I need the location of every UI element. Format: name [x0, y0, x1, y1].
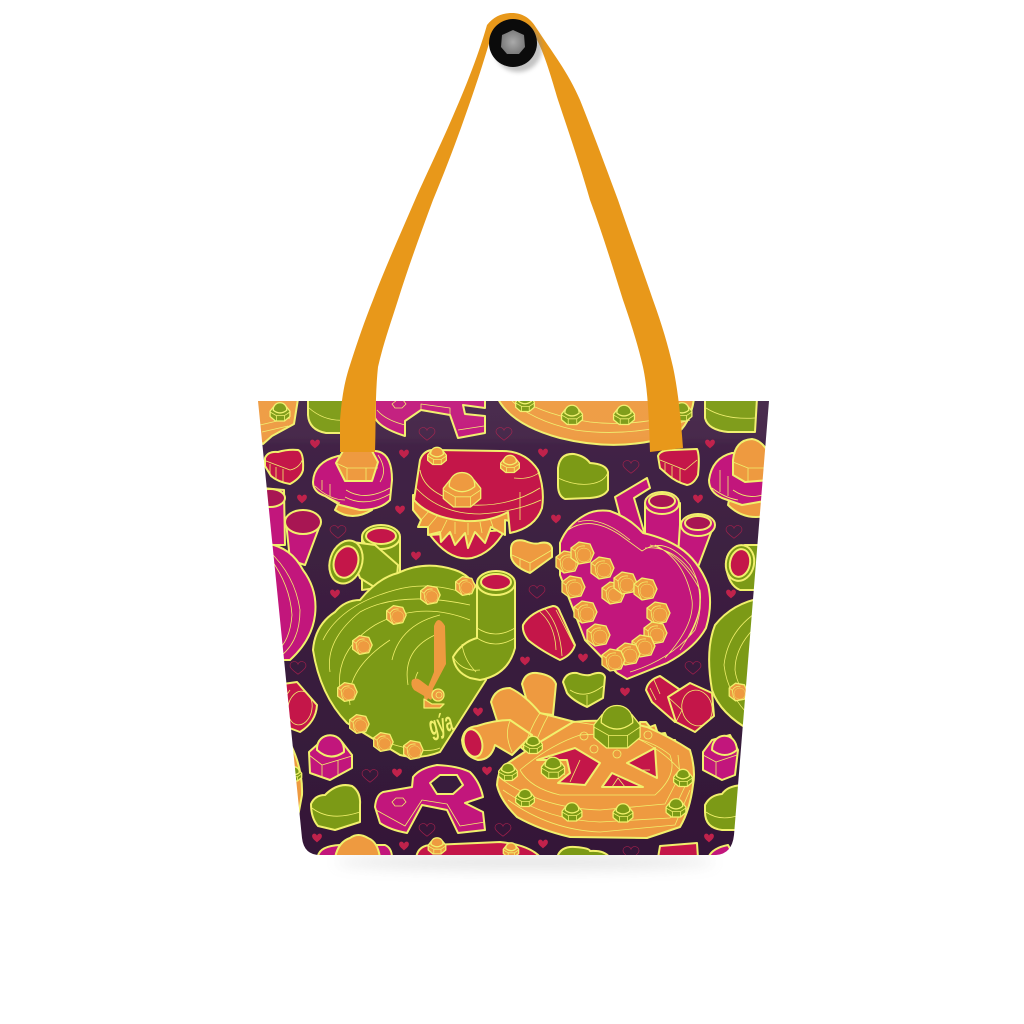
magenta piece bottom [708, 845, 735, 858]
magenta heart left edge [266, 487, 322, 661]
crank lever [411, 620, 446, 708]
orange piece left edge [262, 745, 302, 822]
pipe B [344, 540, 399, 586]
big green cap nut [594, 705, 640, 748]
large orange disc top [498, 401, 695, 446]
green heart lower right [705, 785, 745, 830]
magenta cap nut lower right [703, 735, 738, 780]
red heart bottom [658, 843, 698, 858]
magenta cap nut lower left [309, 735, 352, 780]
red gear heart [413, 447, 543, 559]
disc body [497, 721, 694, 838]
red heart center [523, 606, 575, 660]
green heart bottom [557, 847, 610, 858]
strap [340, 13, 683, 452]
green heart center top [558, 454, 608, 499]
green heart lower left [311, 785, 360, 830]
green nuts [499, 736, 692, 822]
pipe A [362, 537, 400, 590]
green heart top right [705, 398, 757, 432]
green heart right edge with pipe [708, 544, 758, 728]
peg [489, 19, 537, 67]
small solid hearts [297, 440, 736, 850]
pipe C elbow [453, 583, 515, 680]
green heart top left [307, 401, 342, 434]
gear teeth on disc [639, 721, 676, 741]
tote bag [250, 394, 780, 865]
orange heart small [511, 540, 552, 573]
ground shadow under bag [335, 855, 715, 869]
orange mechanical heart [461, 673, 694, 838]
bag fabric background [250, 395, 780, 865]
bottom row pattern pieces [318, 835, 735, 858]
hem light band [250, 401, 780, 445]
magenta stack with orange bolt right [709, 439, 770, 517]
red heart top right [658, 449, 699, 485]
body [313, 566, 490, 757]
green mechanical heart [313, 525, 515, 759]
red hex bolt [646, 676, 716, 732]
magenta stacked heart with orange bolt [313, 451, 392, 516]
magenta and orange piece bottom [318, 845, 392, 858]
magenta wrench top [375, 399, 485, 438]
magenta wrench bottom [375, 765, 485, 833]
orange corner piece top left [256, 399, 298, 444]
red nut left [270, 682, 317, 732]
outline hearts [290, 428, 742, 859]
bolts in heart shape [556, 542, 670, 671]
green heart small center [563, 673, 605, 707]
pipes [615, 478, 715, 575]
window cut-outs [537, 748, 600, 785]
magenta mechanical heart [556, 478, 715, 679]
orange bolts [338, 577, 475, 759]
orange tubes [522, 673, 556, 715]
red heart upper left [265, 450, 303, 484]
red disc bottom [416, 842, 541, 858]
logo mark: gýa [425, 706, 457, 741]
peg shadow [494, 24, 542, 72]
body [560, 510, 710, 679]
